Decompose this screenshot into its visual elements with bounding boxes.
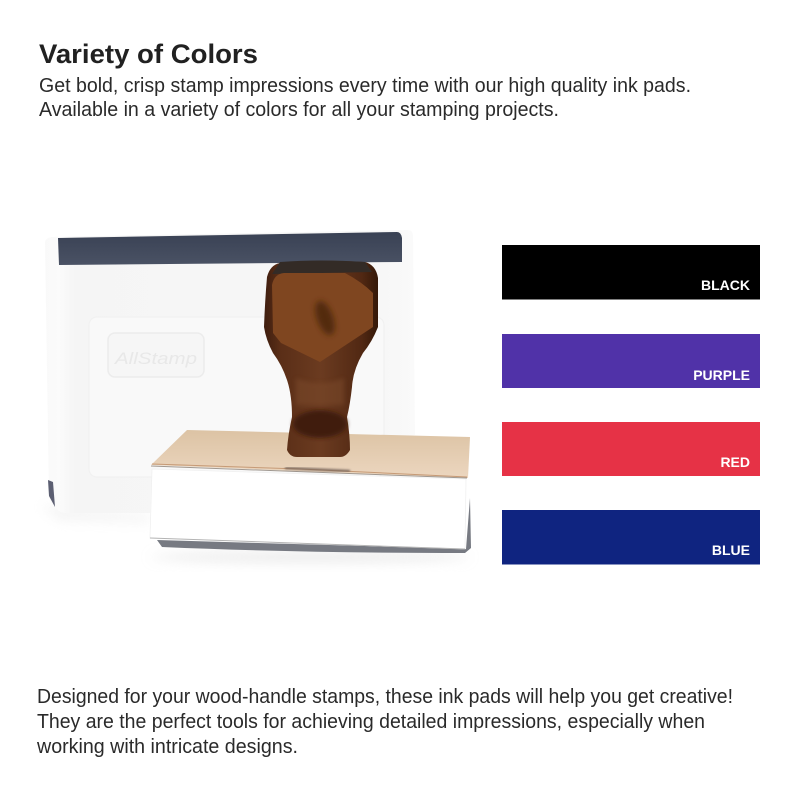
closing text: working with intricate designs. [36,736,298,758]
color swatch: purple: PURPLE [693,367,750,383]
closing text [36,686,733,758]
intro text: Get bold, crisp stamp impressions every time with our high quality ink pads. [39,75,691,97]
color swatch: blue: BLUE [712,542,750,558]
title: Variety of Colors [39,39,258,69]
ink pad lid window [58,232,402,265]
color swatch: red: RED [720,454,750,470]
product photo: ink pad and wood-handle stamp [40,230,471,562]
stamp shadow [150,552,470,562]
intro text [39,75,691,121]
embossed logo plate [108,333,204,377]
white stamp label [150,469,466,549]
color swatch: purple [502,334,760,388]
intro text: Available in a variety of colors for all your stamping projects. [39,99,559,121]
wood mount [151,430,470,478]
color swatch: black: BLACK [701,277,750,293]
wooden handle [264,260,378,457]
color swatch: red [502,422,760,476]
ink pad case [40,230,415,522]
stamp rubber base [157,498,471,553]
embossed logo plate: AllStamp [114,349,197,368]
closing text: Designed for your wood-handle stamps, these ink pads will help you get creative! [37,686,733,708]
color swatch: blue [502,510,760,564]
color swatch: black [502,245,760,300]
closing text: They are the perfect tools for achieving detailed impressions, especially when [37,711,705,733]
